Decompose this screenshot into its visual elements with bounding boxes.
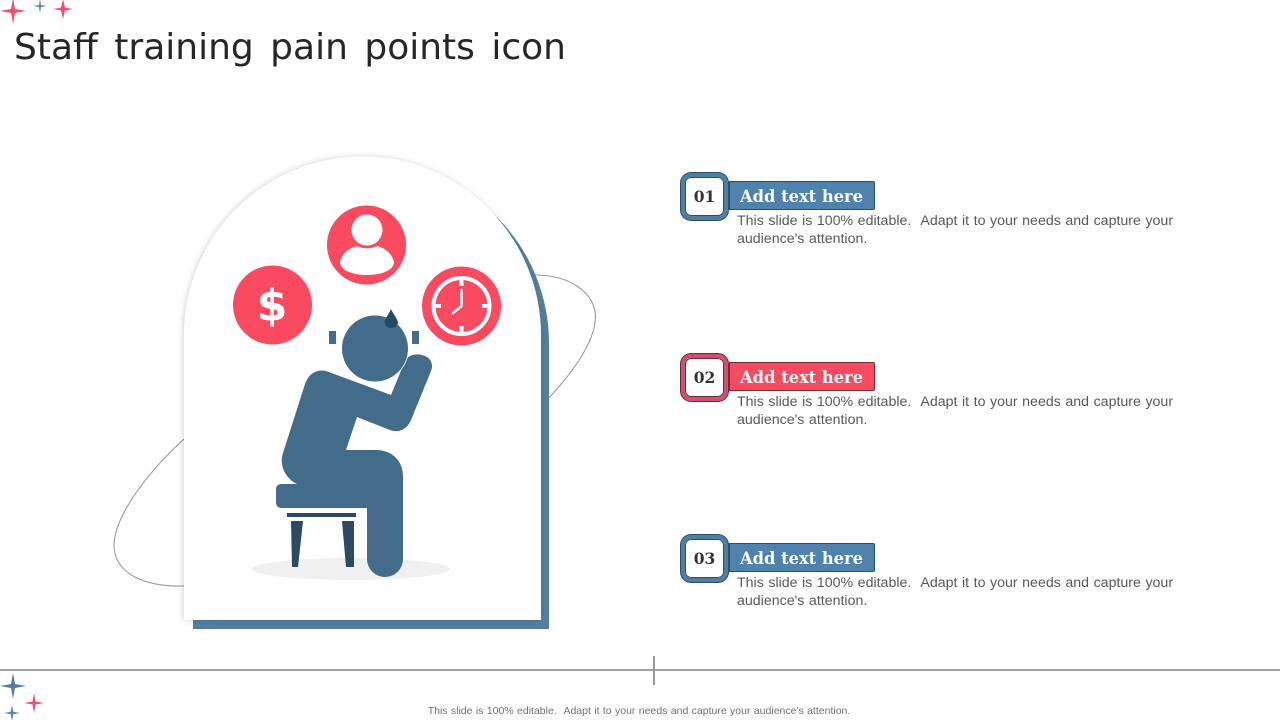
icon: clock circle — [422, 266, 501, 346]
icon: dollar circle — [233, 266, 312, 344]
description 01: audience's attention. — [737, 231, 867, 247]
heading 03 — [729, 543, 875, 572]
number badge 02 — [681, 354, 728, 401]
stress marks — [329, 331, 336, 344]
description 02 — [737, 394, 1173, 428]
decorative orbit ring — [114, 275, 596, 586]
number badge 01: 01 — [694, 187, 715, 206]
heading 02: Add text here — [740, 368, 863, 387]
white arch panel — [184, 156, 541, 620]
heading 01 — [729, 181, 875, 210]
floor shadow — [252, 558, 450, 580]
stool — [287, 513, 356, 517]
number badge 02: 02 — [694, 368, 715, 387]
description 01: This slide is 100% editable. Adapt it to your needs and capture your — [737, 213, 1173, 229]
sweat drop — [384, 309, 398, 328]
description 02: audience's attention. — [737, 412, 867, 428]
item 02 — [680, 353, 1173, 428]
description 03: This slide is 100% editable. Adapt it to your needs and capture your — [737, 575, 1173, 591]
title: Staff training pain points icon — [14, 27, 566, 68]
description 01 — [737, 213, 1173, 247]
description 03: audience's attention. — [737, 593, 867, 609]
icon: dollar circle: $ — [257, 280, 287, 331]
heading 03: Add text here — [740, 549, 863, 568]
item 01 — [680, 172, 1173, 247]
body — [276, 354, 432, 577]
number badge 03 — [681, 535, 728, 582]
item 03 — [680, 534, 1173, 609]
description 02: This slide is 100% editable. Adapt it to your needs and capture your — [737, 394, 1173, 410]
number badge 03: 03 — [694, 549, 715, 568]
arch backing in blue — [193, 165, 549, 629]
heading 01: Add text here — [740, 187, 863, 206]
footer divider and stars — [0, 656, 1280, 720]
description 03 — [737, 575, 1173, 609]
icon: stressed person — [276, 309, 432, 577]
heading 02 — [729, 362, 875, 391]
head — [342, 316, 408, 382]
footer note: This slide is 100% editable. Adapt it to your needs and capture your audience's attention. — [428, 705, 850, 717]
number badge 01 — [681, 173, 728, 220]
icon: person circle — [327, 206, 406, 284]
decorative stars top — [0, 0, 73, 24]
